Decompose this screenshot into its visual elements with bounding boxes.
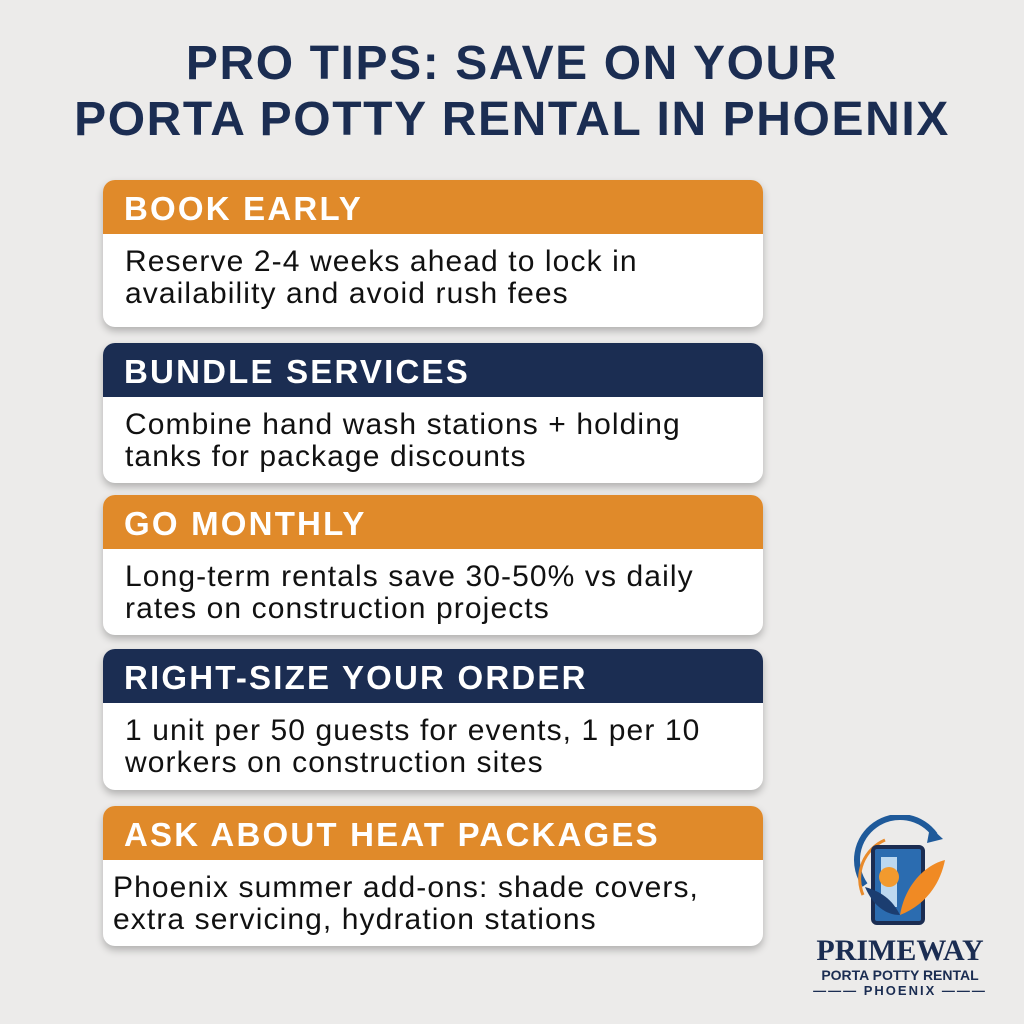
icon: logo mark bbox=[854, 815, 945, 925]
card: go monthly: GO MONTHLY bbox=[124, 505, 367, 542]
card: heat packages: ASK ABOUT HEAT PACKAGES bbox=[124, 816, 660, 853]
title: PRO TIPS: SAVE ON YOUR bbox=[186, 37, 838, 90]
card: bundle services: tanks for package discounts bbox=[125, 440, 527, 473]
card: heat packages bbox=[103, 806, 763, 946]
title: PORTA POTTY RENTAL IN PHOENIX bbox=[74, 93, 950, 146]
brand text bbox=[813, 934, 987, 998]
brand text: ——— PHOENIX ——— bbox=[813, 983, 987, 998]
card: right-size: RIGHT-SIZE YOUR ORDER bbox=[124, 659, 588, 696]
card: go monthly: rates on construction projects bbox=[125, 592, 550, 625]
logo bbox=[813, 815, 987, 998]
title bbox=[74, 37, 950, 146]
card: book early bbox=[103, 180, 763, 327]
card: go monthly: Long-term rentals save 30-50% vs daily bbox=[125, 560, 694, 593]
card: right-size bbox=[103, 649, 763, 790]
brand text: PORTA POTTY RENTAL bbox=[821, 967, 979, 983]
card: book early: BOOK EARLY bbox=[124, 190, 363, 227]
card: go monthly bbox=[103, 495, 763, 635]
card: bundle services: BUNDLE SERVICES bbox=[124, 353, 470, 390]
card: bundle services bbox=[103, 343, 763, 483]
card: book early: availability and avoid rush fees bbox=[125, 277, 569, 310]
card: heat packages: extra servicing, hydration stations bbox=[113, 903, 597, 936]
card: right-size: workers on construction sites bbox=[125, 746, 544, 779]
card: heat packages: Phoenix summer add-ons: shade covers, bbox=[113, 871, 699, 904]
card: book early: Reserve 2-4 weeks ahead to lock in bbox=[125, 245, 638, 278]
card: right-size: 1 unit per 50 guests for events, 1 per 10 bbox=[125, 714, 700, 747]
brand text: PRIMEWAY bbox=[816, 934, 984, 967]
card: bundle services: Combine hand wash stations + holding bbox=[125, 408, 681, 441]
